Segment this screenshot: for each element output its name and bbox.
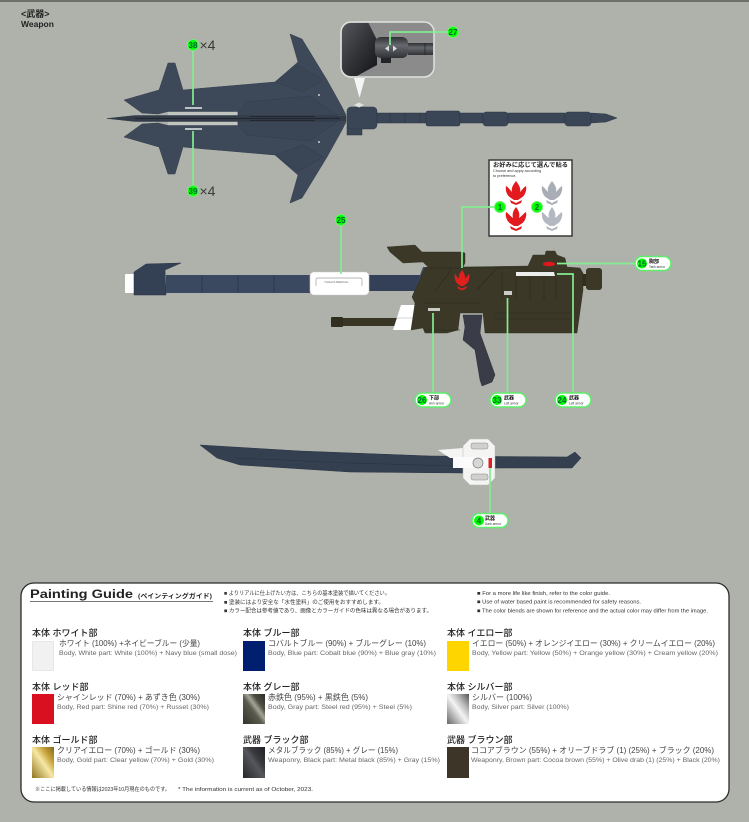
label: part 26 — [415, 313, 451, 407]
label: part 38 x4 — [188, 37, 216, 105]
icon: red emblem on rifle — [455, 270, 469, 290]
color item: body red: シャインレッド (70%) + あずき色 (30%) — [57, 692, 200, 702]
label: part 4 — [472, 468, 508, 528]
icon: red emblem 1 — [506, 181, 526, 205]
label: part 39 x4: ×4 — [200, 183, 216, 199]
label: part 2 — [532, 202, 542, 212]
color item: body silver — [447, 681, 569, 724]
notes: japanese: ■ カラー配合は参考値であり、画像とカラーガイドの色味は異なる場合があります。 — [224, 606, 432, 614]
color item: body yellow: 本体 イエロー部 — [447, 627, 512, 638]
color item: weapon black: 武器 ブラック部 — [243, 734, 309, 745]
label: part 39 x4: 39 — [189, 187, 198, 196]
color item: weapon brown: Weaponry, Brown part: Cocoa brown (55%) + Olive drab (1) (25%) + Black (20%) — [471, 757, 720, 764]
label: part 26: Arm armor — [429, 402, 445, 406]
color item: body gold: クリアイエロー (70%) + ゴールド (30%) — [57, 745, 200, 755]
color item: weapon black — [243, 734, 440, 778]
notes: english: ■ For a more life like finish, refer to the color guide. — [477, 591, 610, 597]
color item: body blue: 本体 ブルー部 — [243, 627, 300, 638]
label: part 33: 33 — [493, 396, 502, 405]
label: part 27: 27 — [449, 28, 458, 37]
label: part 25 — [336, 214, 346, 274]
color item: body white — [32, 627, 237, 670]
color item: body silver: Body, Silver part: Silver (100%) — [472, 704, 569, 711]
decal sheet: emblem choices: Choose and apply according — [493, 169, 541, 173]
color item: body yellow — [447, 627, 718, 671]
label: part 15: Tank armor — [649, 265, 666, 269]
label: part 27 — [390, 26, 458, 45]
label: part 2: 2 — [535, 203, 540, 212]
heading: painting guide — [30, 589, 213, 602]
label: part 33 — [490, 298, 526, 407]
panel: painting guide — [21, 583, 729, 802]
notes: english — [477, 591, 708, 614]
label: part 38 x4: ×4 — [200, 37, 216, 53]
label: part 24: 24 — [558, 396, 567, 405]
color item: body gray: 本体 グレー部 — [243, 681, 300, 692]
color item: body yellow: イエロー (50%) + オレンジイエロー (30%) + クリームイエロー (20%) — [472, 639, 715, 648]
color item: weapon black: Weaponry, Black part: Metal black (85%) + Gray (15%) — [268, 757, 440, 764]
label: part 33: 武器 — [504, 396, 514, 402]
color item: body blue: Body, Blue part: Cobalt blue (90%) + Blue gray (10%) — [268, 650, 436, 657]
color item: body gold — [32, 734, 214, 778]
color item: body silver: 本体 シルバー部 — [447, 681, 513, 692]
footnote — [35, 785, 314, 793]
heading: painting guide: Painting Guide — [30, 589, 133, 601]
callout: detail of part 27 — [341, 22, 434, 98]
color item: body gray: Body, Gray part: Steel red (95%) + Steel (5%) — [268, 704, 412, 711]
icon: gray emblem 1 — [542, 181, 562, 205]
section heading: weapon: <武器> — [21, 9, 50, 19]
color item: body white: 本体 ホワイト部 — [32, 627, 98, 638]
footnote: * The information is current as of October, 2023. — [178, 787, 314, 793]
label: part 39 x4 — [188, 131, 216, 199]
decal sheet: emblem choices: お好みに応じて選んで貼る — [493, 161, 568, 169]
notes: japanese: ■ 塗装にはより安全な「水性塗料」のご使用をおすすめします。 — [224, 598, 384, 606]
decal sheet: emblem choices: to preference. — [493, 174, 516, 178]
icon: red emblem 2 — [506, 207, 526, 231]
color item: weapon black: メタルブラック (85%) + グレー (15%) — [268, 745, 398, 755]
icon: gray emblem 2 — [542, 207, 562, 231]
decal sheet: emblem choices — [489, 160, 572, 236]
color item: body gold: 本体 ゴールド部 — [32, 734, 98, 745]
label: part 15 — [557, 256, 671, 270]
color item: body yellow: Body, Yellow part: Yellow (50%) + Orange yellow (30%) + Cream yellow (20%) — [472, 650, 718, 657]
rifle weapon — [125, 245, 602, 386]
footnote: ※ここに掲載している情報は2023年10月現在のものです。 — [35, 785, 170, 793]
heading: painting guide: (ペインティングガイド) — [138, 591, 212, 600]
color item: body red: 本体 レッド部 — [32, 681, 89, 692]
color item: body red — [32, 681, 209, 724]
color item: body blue: コバルトブルー (90%) + ブルーグレー (10%) — [268, 638, 426, 648]
color item: body gold: Body, Gold part: Clear yellow (70%) + Gold (30%) — [57, 757, 214, 764]
label: part 24 — [555, 274, 591, 407]
color item: body blue — [243, 627, 436, 671]
label: part 26: 下部 — [429, 394, 439, 402]
rifle weapon: YGGAYA MEDICAL — [324, 280, 349, 284]
notes: english: ■ Use of water based paint is recommended for safety reasons. — [477, 600, 641, 606]
color item: weapon brown: ココアブラウン (55%) + オリーブドラブ (1) (25%) + ブラック (20%) — [471, 745, 714, 755]
label: part 24: Left armor — [569, 402, 584, 406]
notes: english: ■ The color blends are shown for reference and the actual color may differ from the image. — [477, 608, 708, 614]
label: part 15: 胸部 — [649, 258, 659, 265]
halberd weapon — [107, 34, 617, 203]
label: part 4: Dark armor — [485, 522, 502, 526]
section heading: weapon — [21, 9, 54, 29]
color item: body gray — [243, 681, 412, 724]
notes: japanese: ■ よりリアルに仕上げたい方は、こちらの基本塗装で描いてください。 — [224, 589, 390, 597]
label: part 1: 1 — [498, 203, 503, 212]
label: part 33: Left armor — [504, 402, 519, 406]
label: part 1 — [462, 202, 506, 268]
label: part 4: 武器 — [485, 516, 495, 522]
color item: weapon brown — [447, 734, 720, 778]
color item: body white: Body, White part: White (100%) + Navy blue (small dose) — [59, 650, 237, 657]
color item: body red: Body, Red part: Shine red (70%) + Russet (30%) — [57, 704, 209, 711]
label: part 38 x4: 38 — [189, 41, 198, 50]
label: part 26: 26 — [418, 396, 427, 405]
label: part 25: 25 — [337, 216, 346, 225]
color item: body gray: 赤鉄色 (95%) + 黒鉄色 (5%) — [268, 692, 368, 702]
section heading: weapon: Weapon — [21, 19, 54, 29]
color item: body silver: シルバー (100%) — [472, 693, 532, 702]
label: part 24: 武器 — [569, 396, 579, 402]
label: part 15: 15 — [638, 260, 647, 268]
color item: weapon brown: 武器 ブラウン部 — [447, 734, 513, 745]
sword weapon — [200, 439, 581, 485]
label: part 4: 4 — [477, 516, 482, 526]
notes: japanese — [224, 589, 432, 614]
color item: body white: ホワイト (100%) +ネイビーブルー (少量) — [59, 638, 200, 648]
